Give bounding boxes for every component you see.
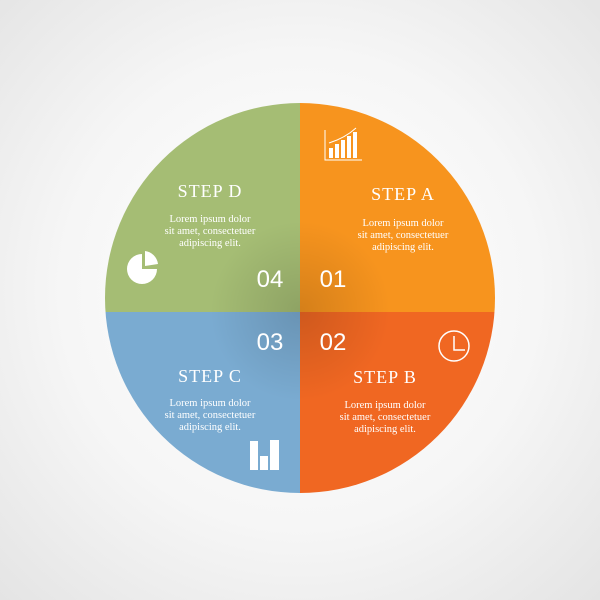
icon: clock	[439, 331, 469, 361]
heading: step A: STEP A	[371, 184, 435, 204]
text: step D	[165, 214, 256, 249]
text: step A: Lorem ipsum dolor	[362, 218, 444, 229]
text: step B: adipiscing elit.	[354, 424, 416, 435]
pie chart	[100, 100, 500, 502]
text: step C: Lorem ipsum dolor	[169, 398, 251, 409]
number 03: 03	[257, 329, 283, 356]
panel: step B	[300, 312, 500, 502]
text: step C: sit amet, consectetuer	[165, 410, 256, 421]
text: step B	[340, 400, 431, 435]
panel: step C	[100, 312, 300, 502]
text: step B: sit amet, consectetuer	[340, 412, 431, 423]
text: step D: sit amet, consectetuer	[165, 226, 256, 237]
panel: step D	[100, 100, 300, 312]
text: step A: sit amet, consectetuer	[358, 230, 449, 241]
text: step B: Lorem ipsum dolor	[344, 400, 426, 411]
number 01: 01	[320, 266, 346, 293]
panel: step A	[300, 100, 500, 312]
text: step D: adipiscing elit.	[179, 238, 241, 249]
number 04: 04	[257, 266, 283, 293]
icon: bars	[250, 440, 279, 470]
heading: step B: STEP B	[353, 367, 417, 387]
text: step C	[165, 398, 256, 433]
heading: step C: STEP C	[178, 366, 242, 386]
icon: pie	[127, 251, 158, 284]
text: step A: adipiscing elit.	[372, 242, 434, 253]
text: step D: Lorem ipsum dolor	[169, 214, 251, 225]
number 02: 02	[320, 329, 346, 356]
text: step C: adipiscing elit.	[179, 422, 241, 433]
text: step A	[358, 218, 449, 253]
icon: growth chart	[325, 128, 362, 160]
heading: step D: STEP D	[178, 181, 242, 201]
